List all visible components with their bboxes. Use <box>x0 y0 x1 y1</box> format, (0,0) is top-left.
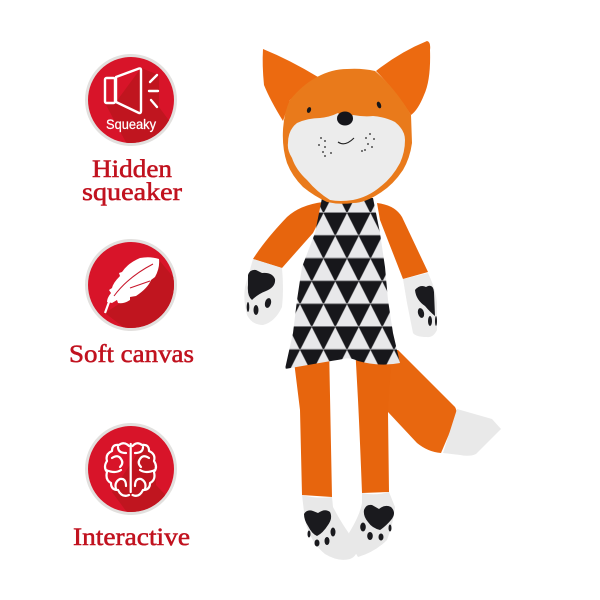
icon: squeaky speaker badge <box>85 54 177 150</box>
patterned body <box>285 198 400 369</box>
heading: hidden squeaker <box>82 154 183 206</box>
illustration: fox plush toy <box>244 41 501 560</box>
eyes <box>306 101 382 114</box>
heading: hidden squeaker: Hidden <box>92 154 172 183</box>
right leg and foot <box>349 345 395 557</box>
icon: feather badge <box>85 239 177 331</box>
heading: interactive: Interactive <box>73 522 190 551</box>
heading: hidden squeaker: squeaker <box>82 177 183 206</box>
icon: brain badge <box>85 423 177 515</box>
icon: squeaky speaker badge: Squeaky <box>106 116 156 132</box>
right ear <box>376 41 430 115</box>
nose <box>337 112 353 126</box>
head <box>283 69 412 204</box>
left leg and foot <box>292 345 358 560</box>
tail <box>385 350 501 456</box>
left ear <box>263 49 318 121</box>
mouth and freckles <box>318 133 375 157</box>
face <box>288 113 405 201</box>
right arm <box>377 203 437 337</box>
left arm <box>244 202 323 325</box>
heading: soft canvas: Soft canvas <box>69 339 194 368</box>
